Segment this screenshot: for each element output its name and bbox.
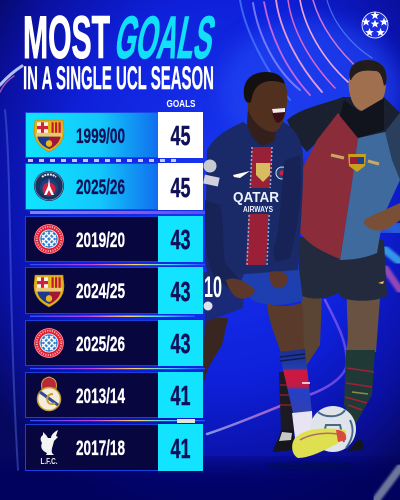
icon: champions league starball [362,11,388,38]
neck [247,108,278,146]
goals value: 43 [170,328,190,359]
season: 2017/18 [76,437,125,460]
column header: goals: GOALS [166,99,196,110]
season: 2019/20 [76,229,125,252]
back leg [204,318,228,382]
row 3: Bayern 2019/20 [26,216,203,262]
left shorts [204,268,245,322]
crest: Bayern [34,224,64,254]
goals value: 41 [170,380,190,411]
goals cell [158,267,203,314]
crest: PSG [34,171,64,201]
crest: Liverpool [40,430,58,466]
goals cell [158,216,203,262]
jersey stripe [246,147,272,265]
crest: Liverpool: L.F.C. [40,457,58,466]
sleeves and yoke [287,97,400,180]
crest and dates [348,154,366,172]
player: Dembele: AIRWAYS [243,205,274,214]
shirt red side [300,113,358,259]
row 5: Bayern 2025/26 [26,320,203,366]
head [247,73,287,132]
goals cell [158,320,203,366]
player: Rivaldo [273,60,400,452]
shirt blue side [340,113,400,260]
goals cell [158,372,203,418]
crests [256,163,270,182]
shorts [298,237,387,301]
front shorts [240,262,303,305]
goals cell [158,112,203,158]
arm on hip [364,203,400,231]
arms [205,200,240,290]
crest: Barcelona [34,120,64,152]
row 6: Real Madrid 2013/14 [26,372,203,418]
rainbow streaks between rows [28,160,205,423]
crest: Real Madrid [38,377,60,410]
hands [226,278,255,299]
front leg [346,298,380,352]
row 1: Barcelona 1999/00 [26,112,203,158]
row 7: Liverpool 2017/18 [26,424,203,471]
torso [205,122,303,288]
season: 2025/26 [76,333,125,356]
player: Dembele [203,72,356,470]
season: 2024/25 [76,280,125,303]
back leg [282,295,322,375]
goals value: 41 [170,433,190,464]
goals cell [158,424,203,471]
title [23,4,221,96]
goals value: 45 [170,172,190,203]
boot [292,429,346,458]
crest: Bayern [34,328,64,358]
title line 1: MOST [23,4,110,71]
text: GOALS [110,4,221,71]
sock [279,349,312,413]
sponsor: QATAR [233,189,279,206]
goals value: 45 [170,120,190,151]
goals value: 43 [170,276,190,307]
goals value: 43 [170,224,190,255]
ground shadow [265,462,355,470]
black undershirt [340,98,384,138]
goals cell [158,163,203,210]
ball [310,406,356,452]
head [349,66,386,111]
row 2: PSG 2025/26 [26,163,203,210]
row 4: Barcelona 2024/25 [26,267,203,314]
crest: Barcelona [34,275,64,307]
season: 2013/14 [76,385,125,408]
season: 1999/00 [76,125,125,148]
front leg [267,303,305,353]
season: 2025/26 [76,176,125,199]
shirt number: 10 [204,271,222,304]
